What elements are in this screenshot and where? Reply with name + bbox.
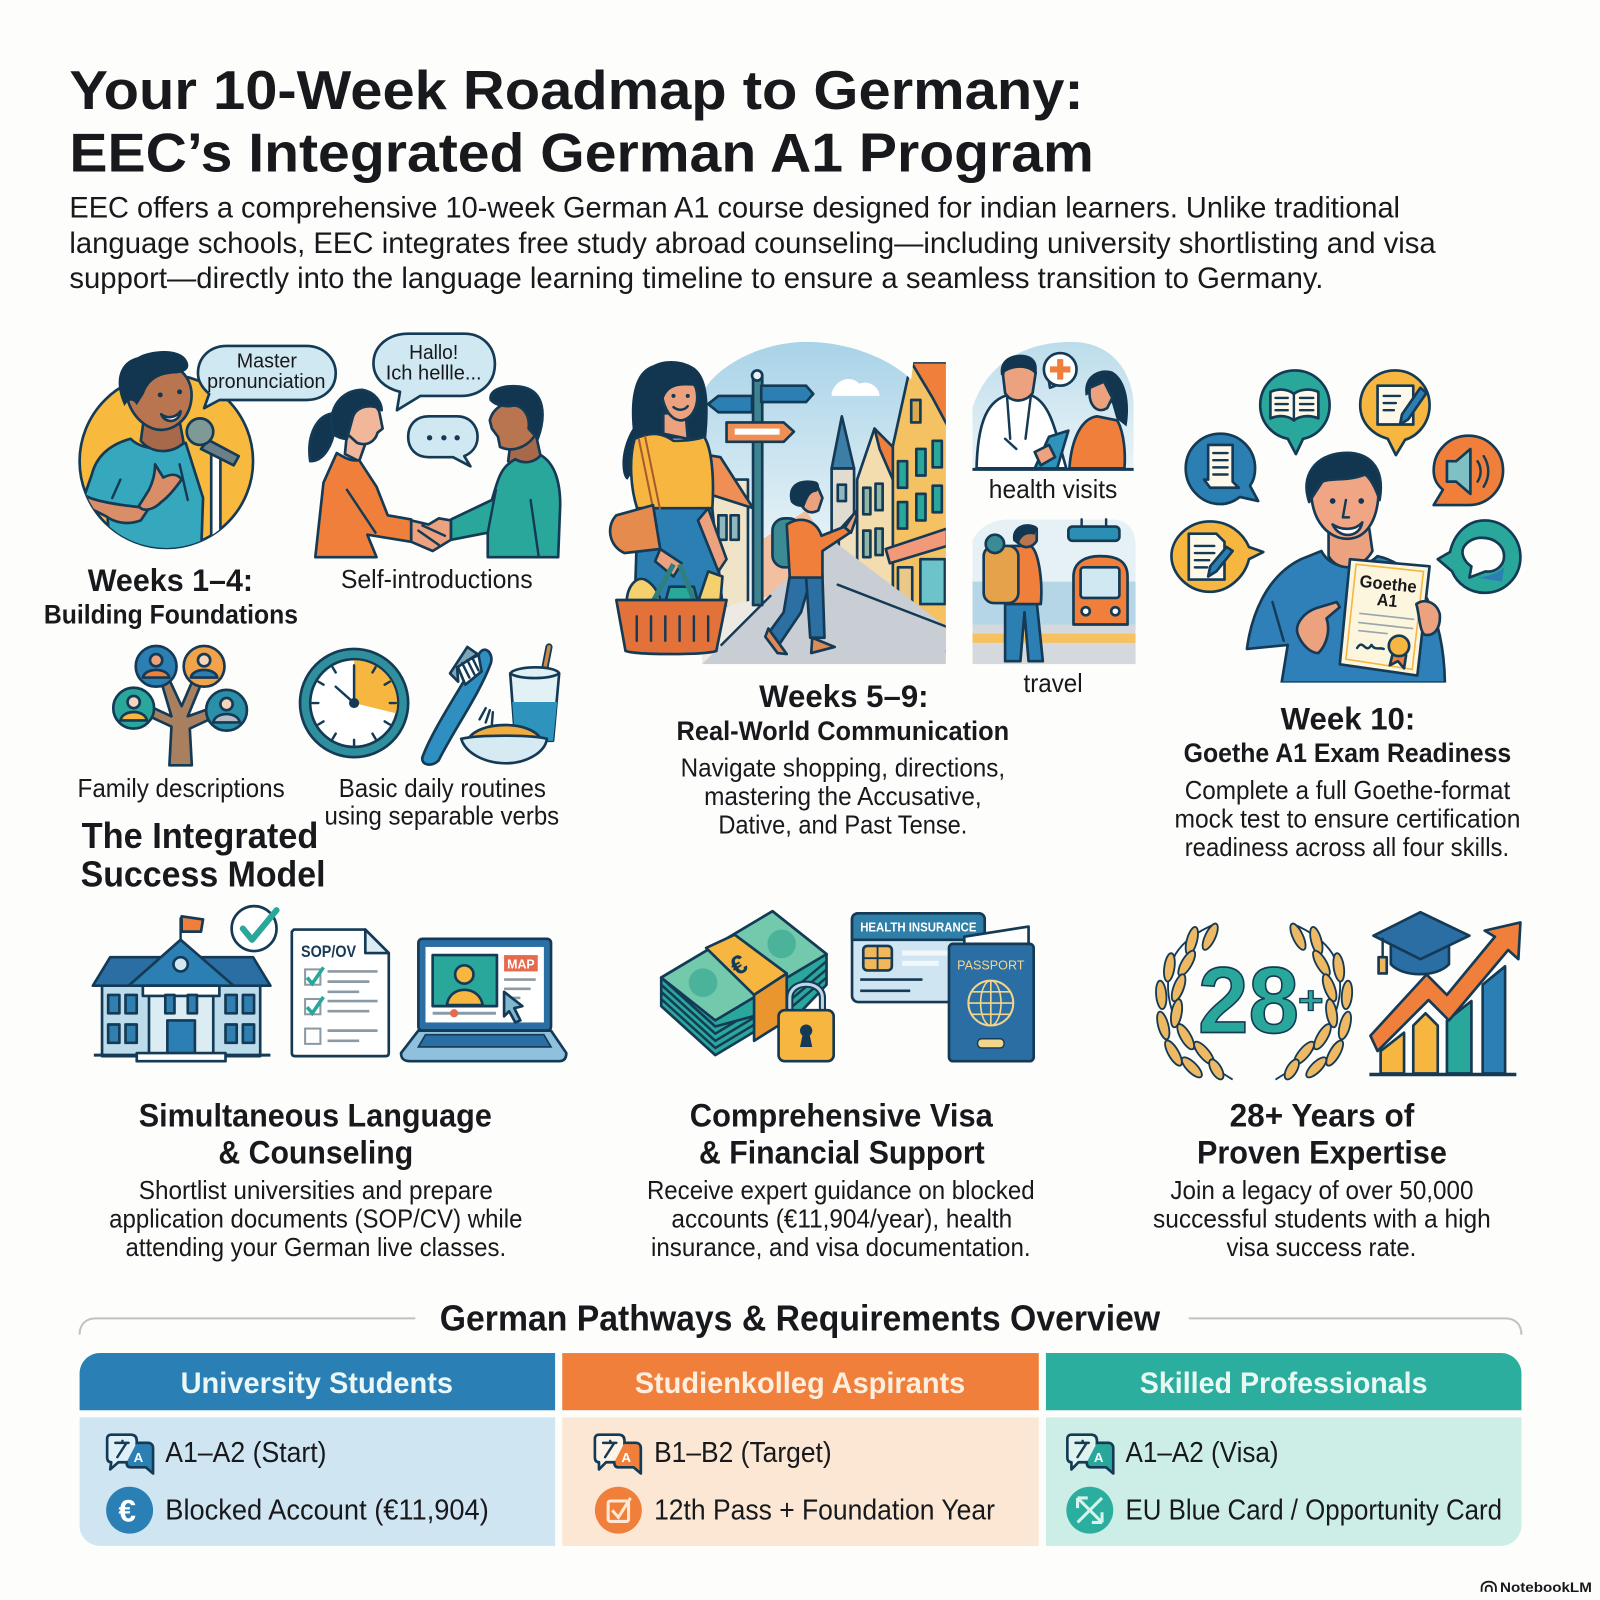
panel: week 10	[1171, 370, 1520, 862]
icon: sound bubble	[1434, 436, 1503, 505]
heading: week 10	[1184, 701, 1511, 768]
heading: week 10: Goethe A1 Exam Readiness	[1184, 738, 1511, 768]
heading: week 10: Week 10:	[1281, 701, 1415, 737]
icon: euro: €	[118, 1492, 136, 1528]
column: skilled professionals: EU Blue Card / Opportunity Card	[1126, 1494, 1502, 1526]
label: basic daily routines	[324, 775, 559, 830]
icon: bowl and glass	[461, 647, 559, 763]
woman with basket	[610, 361, 727, 654]
heading: the integrated success model: The Integrated	[82, 816, 318, 856]
body: 28+ years	[1153, 1177, 1491, 1262]
intro text: EEC offers a comprehensive 10-week German A1 course designed for indian learners. Unlike traditional	[69, 191, 1400, 224]
body: week 10: mock test to ensure certification	[1174, 806, 1520, 834]
icon: money stack: €	[725, 948, 753, 982]
column: skilled professionals	[1046, 1353, 1521, 1546]
icon: health insurance card: HEALTH INSURANCE	[860, 920, 977, 935]
body: visa and financial support: Receive expert guidance on blocked	[647, 1177, 1035, 1205]
heading: 28+ years: 28+ Years of	[1230, 1097, 1414, 1134]
heading: the integrated success model: Success Model	[81, 855, 326, 895]
illustration: handshake	[309, 386, 560, 557]
icon: translate	[595, 1435, 641, 1473]
body: 28+ years: successful students with a high	[1153, 1206, 1491, 1234]
label: basic daily routines: using separable verbs	[324, 802, 559, 830]
heading: visa and financial support	[690, 1097, 994, 1170]
body: visa and financial support: insurance, and visa documentation.	[651, 1234, 1031, 1262]
icon: health insurance card	[852, 913, 985, 1002]
body: weeks 5-9	[681, 755, 1005, 840]
body: week 10: readiness across all four skills.	[1185, 834, 1509, 862]
illustration: man with certificate: A1	[1376, 589, 1399, 611]
heading: visa and financial support: Comprehensive Visa	[690, 1097, 994, 1134]
icon: checkbox	[595, 1487, 642, 1534]
label: travel: travel	[1023, 670, 1083, 698]
heading: weeks 1-4	[44, 562, 298, 629]
heading: weeks 1-4: Building Foundations	[44, 599, 298, 629]
NotebookLM watermark: NotebookLM	[1500, 1580, 1592, 1596]
icon: clock	[300, 649, 408, 757]
speech bubble: hallo: Ich hellle...	[386, 363, 482, 385]
icon: book bubble	[1260, 370, 1330, 454]
section heading: pathways and requirements	[80, 1299, 1521, 1339]
body: weeks 5-9: Dative, and Past Tense.	[718, 812, 967, 840]
body: week 10: Complete a full Goethe-format	[1185, 777, 1510, 805]
speech bubble: master pronunciation: pronunciation	[207, 371, 326, 393]
body: 28+ years: visa success rate.	[1227, 1234, 1416, 1262]
body: simultaneous language and counseling	[109, 1177, 522, 1262]
body: visa and financial support: accounts (€11,904/year), health	[671, 1206, 1012, 1234]
column: studienkolleg aspirants	[562, 1353, 1039, 1546]
body: simultaneous language and counseling: application documents (SOP/CV) while	[109, 1206, 522, 1234]
traveller walking	[765, 480, 857, 654]
chart: rising bars and arrow	[1369, 922, 1520, 1074]
icon: translate: A	[1094, 1450, 1104, 1465]
icon: translate: A	[621, 1450, 631, 1465]
icon: family tree	[113, 646, 247, 765]
intro text: language schools, EEC integrates free study abroad counseling—including university shortlisting and visa	[69, 227, 1436, 260]
icon: euro	[106, 1487, 153, 1534]
icon: laurel wreath with 28+: 28	[1198, 948, 1299, 1053]
speech bubble: master pronunciation: Master	[237, 350, 297, 372]
column: studienkolleg aspirants: 12th Pass + Foundation Year	[654, 1494, 995, 1526]
heading: weeks 1-4: Weeks 1–4:	[88, 562, 253, 598]
panel: weeks 1-4	[44, 334, 560, 830]
column: skilled professionals: Skilled Professionals	[1140, 1367, 1428, 1400]
title: Your 10-Week Roadmap to Germany:	[69, 59, 1084, 121]
icon: laptop with video call	[401, 939, 566, 1061]
body: weeks 5-9: mastering the Accusative,	[704, 783, 982, 811]
illustration: travel	[972, 519, 1136, 664]
icon: laurel wreath with 28+: +	[1298, 979, 1323, 1022]
column: university students	[80, 1353, 555, 1546]
table: pathways	[80, 1353, 1521, 1546]
heading: visa and financial support: & Financial Support	[699, 1133, 985, 1170]
icon: laurel wreath with 28+	[1155, 922, 1354, 1082]
column: university students: A1–A2 (Start)	[165, 1437, 327, 1469]
illustration: man with certificate	[1247, 453, 1445, 683]
icon: laptop with video call: MAP	[507, 956, 535, 971]
intro text: support—directly into the language learning timeline to ensure a seamless transition to Germany.	[69, 262, 1323, 295]
body: simultaneous language and counseling: attending your German live classes.	[126, 1234, 506, 1262]
label: health visits: health visits	[989, 476, 1117, 504]
icon: chat bubble	[1438, 520, 1520, 593]
icon: translate	[1067, 1435, 1113, 1473]
icon: translate: A	[134, 1450, 144, 1465]
heading: weeks 5-9: Weeks 5–9:	[759, 678, 929, 714]
heading: weeks 5-9: Real-World Communication	[677, 716, 1009, 746]
illustration: man with certificate: Goethe	[1359, 571, 1418, 597]
intro text	[69, 191, 1436, 295]
body: visa and financial support	[647, 1177, 1035, 1262]
body: weeks 5-9: Navigate shopping, directions,	[681, 755, 1005, 783]
heading: simultaneous language and counseling: & Counseling	[218, 1133, 413, 1170]
icon: document bubble	[1186, 434, 1258, 504]
heading: simultaneous language and counseling: Simultaneous Language	[139, 1097, 492, 1134]
icon: passport	[949, 927, 1034, 1061]
body: week 10	[1174, 777, 1520, 862]
speech bubble: hallo: Hallo!	[409, 342, 458, 364]
icon: passport: PASSPORT	[957, 957, 1024, 972]
body: 28+ years: Join a legacy of over 50,000	[1170, 1177, 1473, 1205]
column: skilled professionals: A1–A2 (Visa)	[1126, 1437, 1279, 1469]
panel: weeks 5-9	[610, 342, 1136, 840]
heading: the integrated success model	[81, 816, 326, 895]
column: university students: Blocked Account (€11,904)	[165, 1494, 489, 1526]
icon: toothbrush	[422, 647, 493, 765]
icon: padlock	[779, 984, 834, 1061]
icon: note bubble	[1360, 370, 1430, 455]
heading: 28+ years	[1197, 1097, 1447, 1170]
heading: weeks 5-9	[677, 678, 1009, 746]
panel: visa and financial support	[647, 911, 1035, 1262]
heading: simultaneous language and counseling	[139, 1097, 492, 1170]
body: simultaneous language and counseling: Shortlist universities and prepare	[139, 1177, 493, 1205]
panel: simultaneous language and counseling	[93, 906, 566, 1262]
speech bubble: dots	[408, 416, 478, 466]
speech bubble: master pronunciation	[198, 346, 336, 408]
column: studienkolleg aspirants: Studienkolleg Aspirants	[635, 1367, 965, 1400]
column: studienkolleg aspirants: B1–B2 (Target)	[654, 1437, 832, 1469]
panel: 28+ years of expertise	[1153, 912, 1520, 1262]
column: university students: University Students	[181, 1367, 453, 1400]
icon: writing bubble	[1171, 521, 1263, 592]
illustration: health visits	[972, 342, 1134, 469]
icon: translate	[107, 1435, 153, 1473]
icon: SOP document	[292, 930, 389, 1056]
heading: 28+ years: Proven Expertise	[1197, 1133, 1447, 1170]
label: family descriptions: Family descriptions	[78, 775, 285, 803]
icon: check badge	[232, 906, 277, 951]
icon: graduation cap	[1373, 912, 1469, 974]
illustration: city street	[610, 342, 949, 668]
icon: SOP document: SOP/OV	[301, 943, 356, 961]
icon: money stack	[661, 911, 827, 1055]
title	[69, 59, 1094, 183]
signpost	[708, 370, 813, 605]
illustration: man speaking at microphone	[80, 351, 253, 556]
title: EEC’s Integrated German A1 Program	[69, 121, 1094, 183]
speech bubble: hallo	[373, 334, 495, 410]
label: self-introductions: Self-introductions	[341, 566, 533, 594]
label: basic daily routines: Basic daily routines	[339, 775, 546, 803]
icon: university building	[93, 916, 270, 1061]
icon: globe cross	[1066, 1487, 1113, 1534]
section heading: pathways and requirements: German Pathways & Requirements Overview	[440, 1299, 1160, 1339]
